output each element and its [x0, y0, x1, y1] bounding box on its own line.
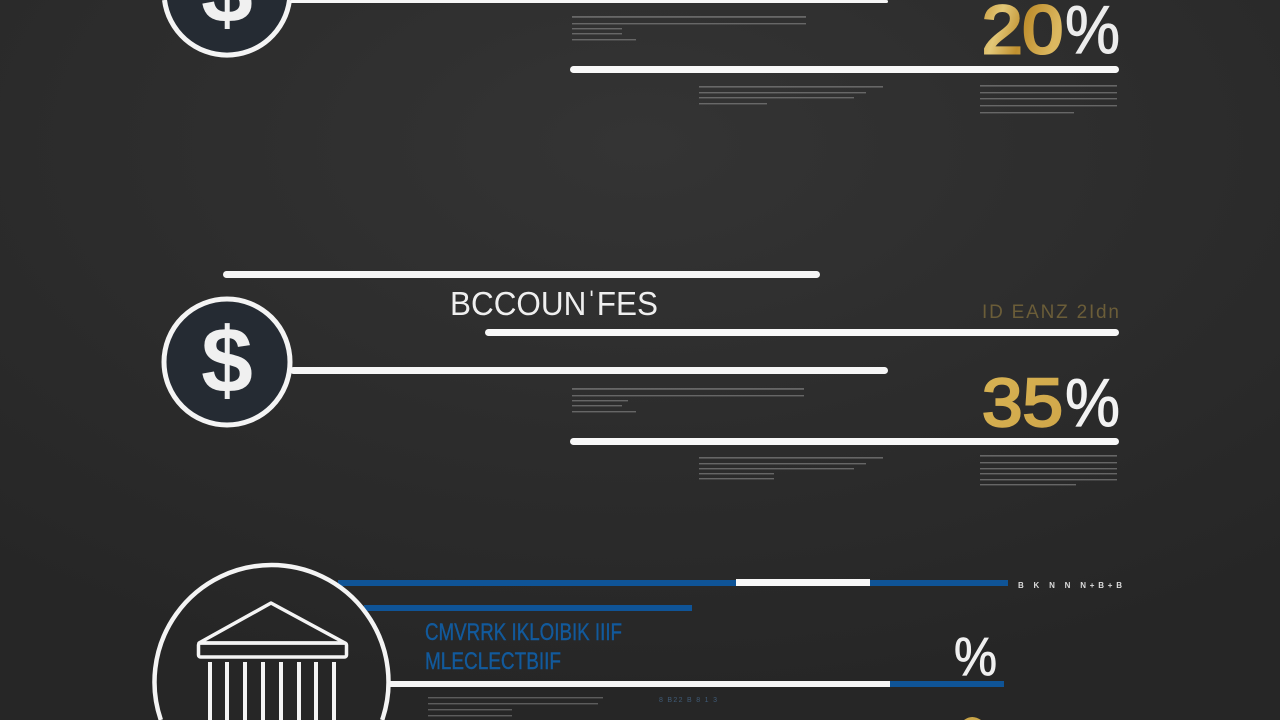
text block: description four — [572, 388, 804, 412]
rule: top of section — [223, 271, 820, 278]
bar: top blue and white segmented — [338, 579, 1008, 586]
label: small white legend: B K N N N+B+B — [1018, 581, 1122, 590]
stat: 35%: % — [1065, 365, 1120, 441]
label: faint blue caption: 8 B22 B 8 1 3 — [659, 697, 717, 704]
text block: description one — [572, 16, 806, 40]
icon: dollar coin, middle — [164, 299, 290, 425]
rule: below 35% — [570, 438, 1119, 445]
heading: BCCOUN FES: BCCOUNˈFES — [450, 285, 658, 322]
heading: blue two-line title: CMVRRK IKLOIBIK IIIF — [425, 619, 622, 646]
rule: coin connector — [290, 367, 888, 374]
text block: description three — [980, 85, 1117, 113]
stat: 20% — [982, 0, 1120, 68]
section: second row (35%) — [164, 271, 1120, 485]
icon: bank in circle — [154, 565, 389, 720]
icon: dollar coin, middle: $ — [201, 308, 253, 412]
stat: gold numeral top, cropped — [964, 717, 981, 720]
bar: bottom white and blue — [390, 681, 1004, 687]
rule: top connector — [290, 0, 888, 3]
section: third row (bank) — [154, 565, 1122, 720]
text block: description six — [980, 455, 1117, 485]
stat: 35% — [982, 365, 1120, 441]
stat: 35%: 35 — [982, 365, 1063, 441]
text block: description seven — [428, 697, 603, 716]
heading: blue two-line title — [425, 619, 622, 675]
section: first row (20%) — [164, 0, 1120, 113]
heading: blue two-line title: MLECLECTBIIF — [425, 648, 561, 675]
rule: below heading — [485, 329, 1119, 336]
icon: dollar coin, top — [164, 0, 290, 55]
stat: percent sign: % — [954, 627, 997, 687]
rule: below 20% — [570, 66, 1119, 73]
bar: second blue — [364, 605, 692, 611]
label: gold caption: ID EANZ 2Idn — [982, 302, 1119, 323]
text block: description five — [699, 457, 883, 479]
text block: description two — [699, 86, 883, 104]
